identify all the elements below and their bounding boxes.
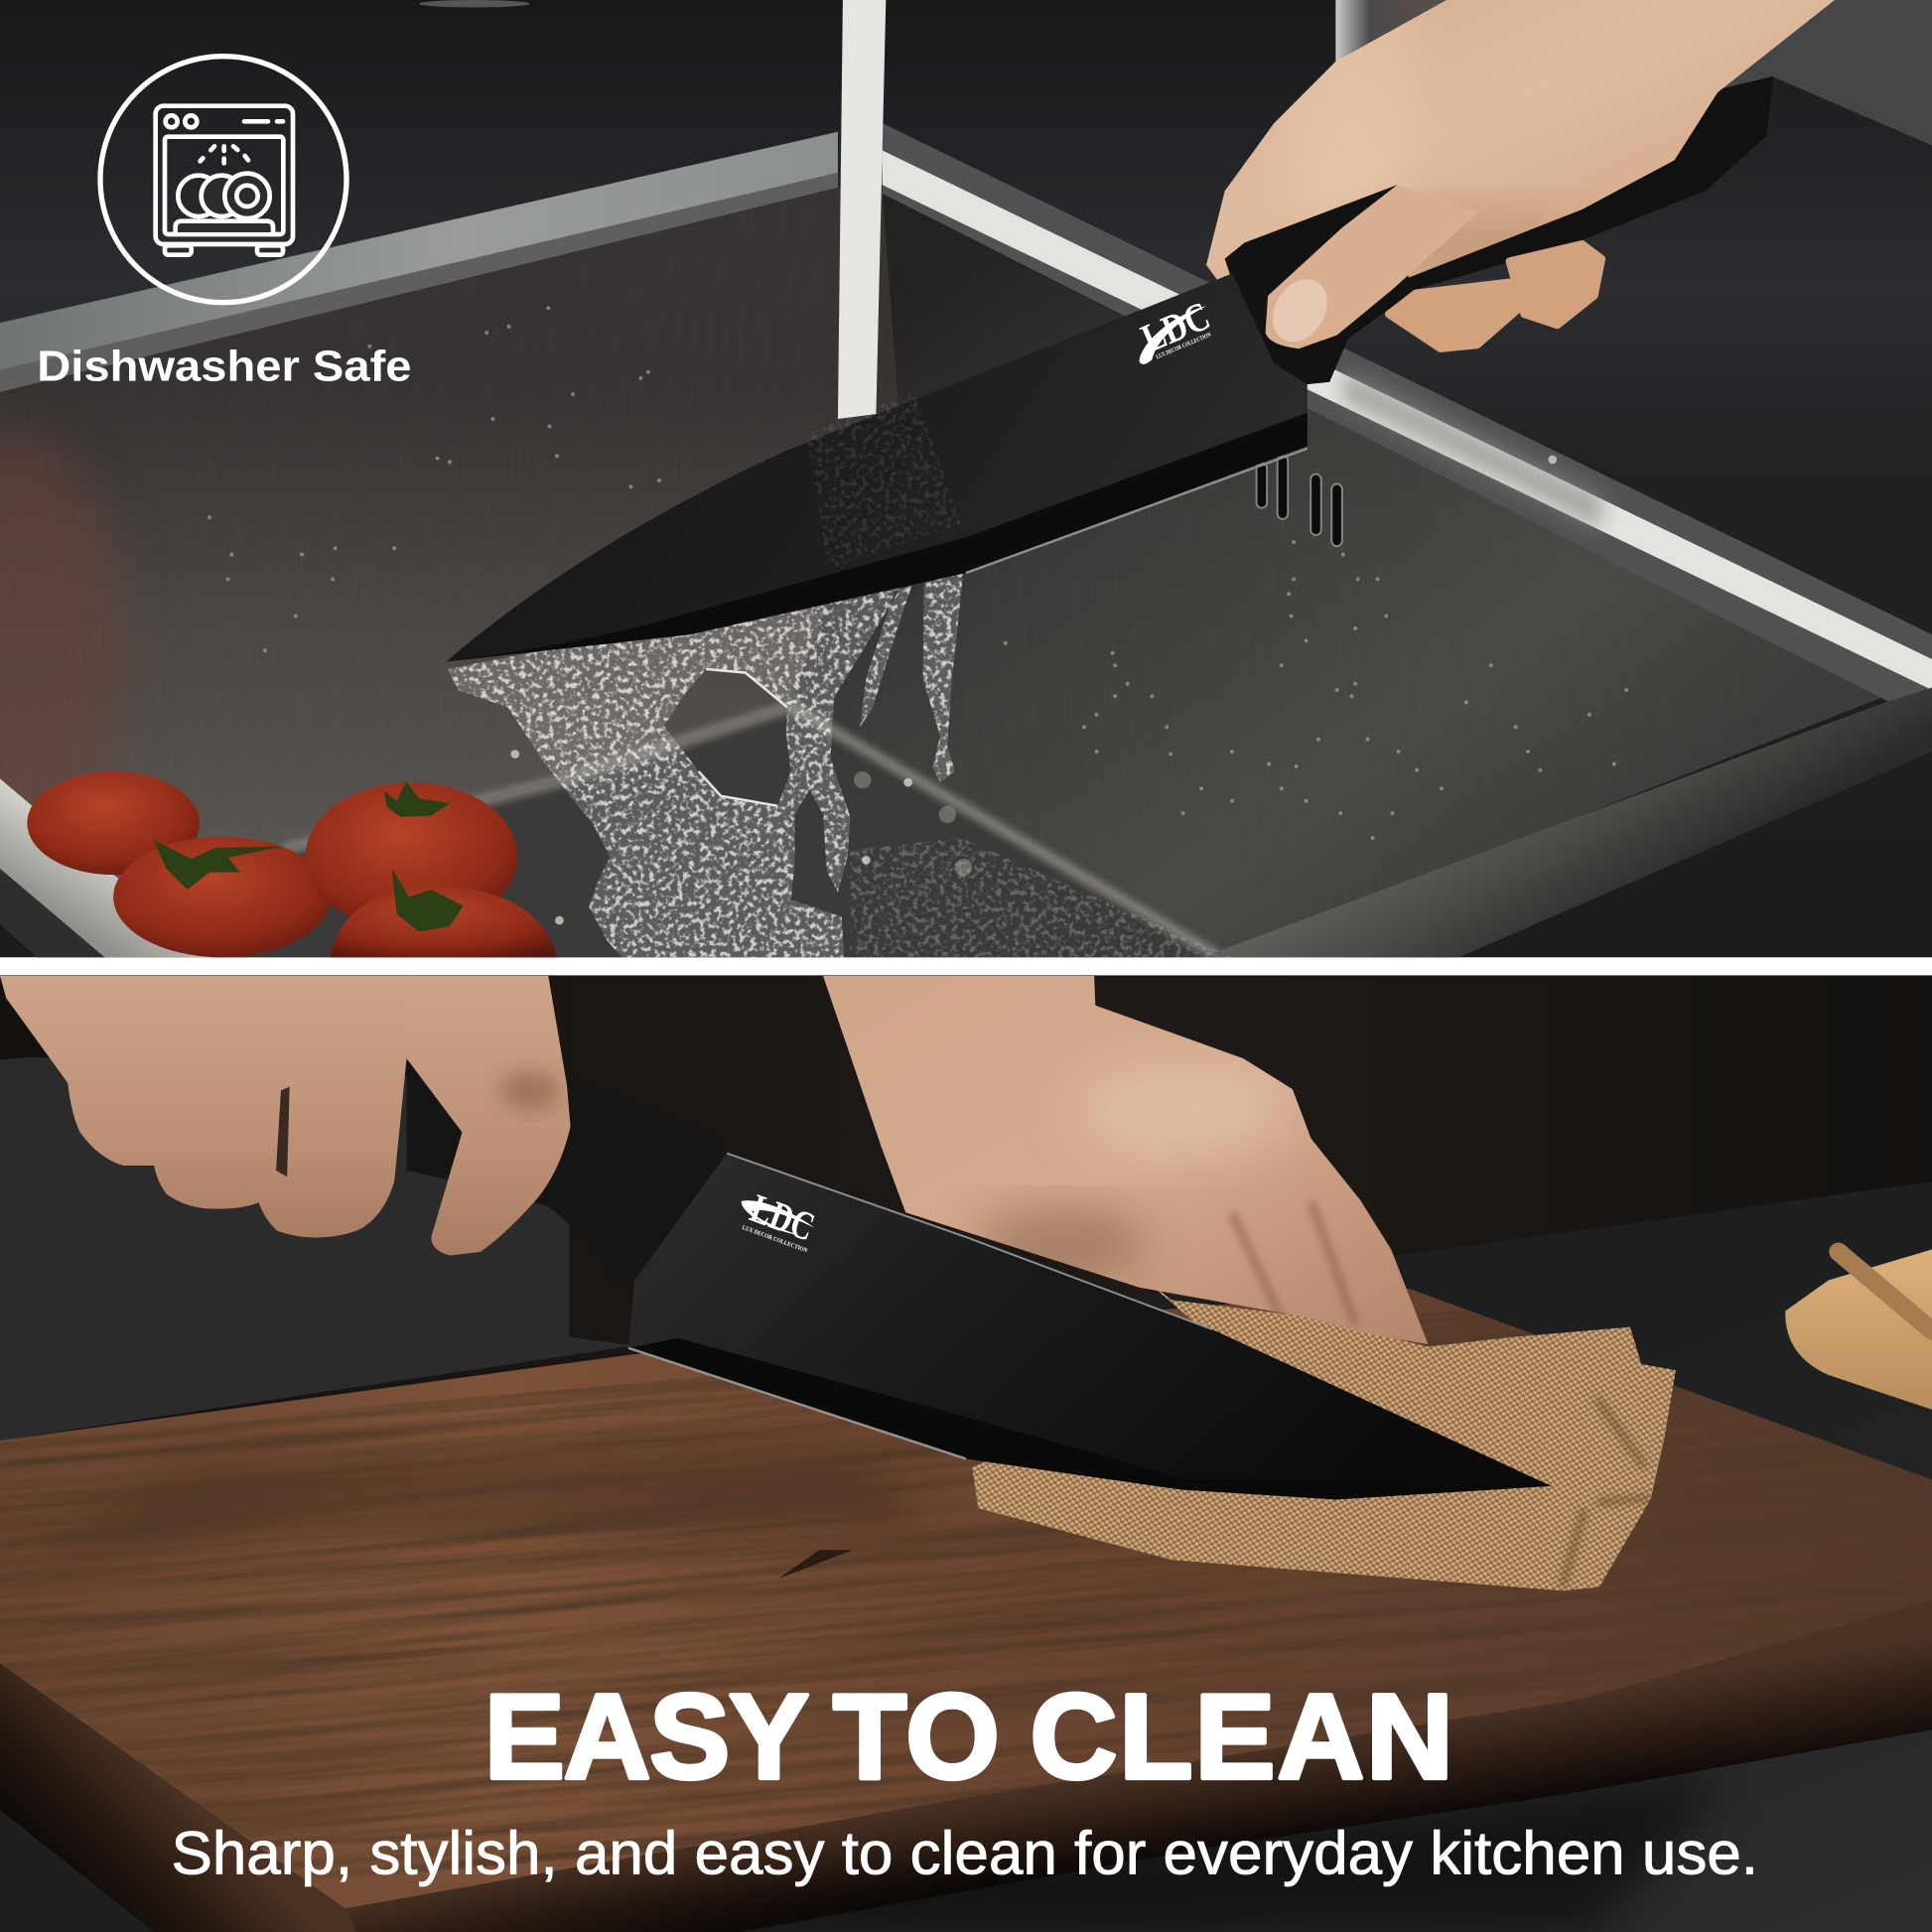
wet patch — [807, 392, 961, 569]
logo: LDC on second knife: LUX DECOR COLLECTION — [741, 1224, 809, 1255]
title: TO — [833, 1669, 1001, 1804]
logo: LDC on first knife — [1124, 292, 1219, 367]
spine highlight — [727, 1154, 1212, 1329]
wooden tray and stick — [1785, 1249, 1932, 1410]
water stream — [838, 0, 886, 419]
thumbnail — [1262, 269, 1338, 351]
tomato back left — [27, 771, 200, 875]
tomato front right — [331, 869, 557, 957]
dark backdrop — [0, 975, 1932, 1468]
faucet base top edge — [419, 0, 530, 7]
countertop — [0, 0, 1932, 957]
handle grip over palm — [1225, 185, 1410, 384]
water droplets — [209, 308, 1626, 920]
sink basin — [0, 188, 1881, 957]
icon: dishwasher in circle — [100, 57, 346, 303]
lower edge highlight — [628, 1348, 966, 1458]
board front face — [345, 1600, 1932, 1932]
front right rim — [1201, 688, 1932, 957]
drain slots — [1262, 461, 1337, 541]
title: EASY — [484, 1669, 808, 1804]
cloth — [972, 1274, 1676, 1590]
icon caption: Dishwasher Safe — [37, 343, 412, 390]
thumb — [1266, 185, 1478, 348]
holding hand — [0, 975, 579, 1265]
hand wiping blade — [813, 976, 1453, 1345]
splash — [448, 569, 1232, 957]
front left rim — [0, 778, 211, 957]
tomato front left — [113, 837, 331, 957]
bevel — [628, 1338, 1552, 1499]
logo: LDC on second knife — [732, 1181, 823, 1255]
knife blade — [446, 274, 1308, 661]
board knife marks — [778, 1550, 853, 1579]
logo: LDC on second knife: LDC — [745, 1185, 820, 1250]
tomato back right — [306, 781, 517, 930]
back left rim — [0, 132, 838, 392]
tabletop — [0, 1181, 1932, 1932]
panel: cutting board photo — [0, 975, 1932, 1932]
knife handle — [407, 1059, 724, 1283]
second knife blade — [628, 1154, 1552, 1499]
cloth folds — [1563, 1399, 1651, 1587]
fist — [0, 975, 419, 1246]
logo: LDC on first knife: LDC — [1135, 293, 1216, 361]
knife handle — [1225, 76, 1773, 384]
panel: sink photo — [0, 0, 1932, 957]
subtitle: Sharp, stylish, and easy to clean for everyday kitchen use. — [172, 1820, 1758, 1887]
blade bevel — [446, 413, 1308, 661]
index finger and thumb — [400, 975, 579, 1265]
text shadow band — [369, 1774, 1725, 1932]
title: CLEAN — [1031, 1669, 1455, 1804]
back right rim — [883, 123, 1932, 727]
faucet behind hand — [1335, 0, 1449, 65]
chair cushion left — [0, 1057, 634, 1441]
fingers under handle — [1389, 244, 1601, 348]
cutting board top surface — [0, 1270, 1932, 1909]
board left face — [0, 1663, 357, 1932]
wall corner top right — [1718, 0, 1932, 145]
palm and wrist — [1195, 0, 1849, 369]
hand holding knife — [1195, 0, 1849, 384]
tomatoes — [27, 771, 557, 957]
blade edge — [966, 449, 1308, 573]
logo: LDC on first knife: LUX DECOR COLLECTION — [1155, 332, 1212, 360]
